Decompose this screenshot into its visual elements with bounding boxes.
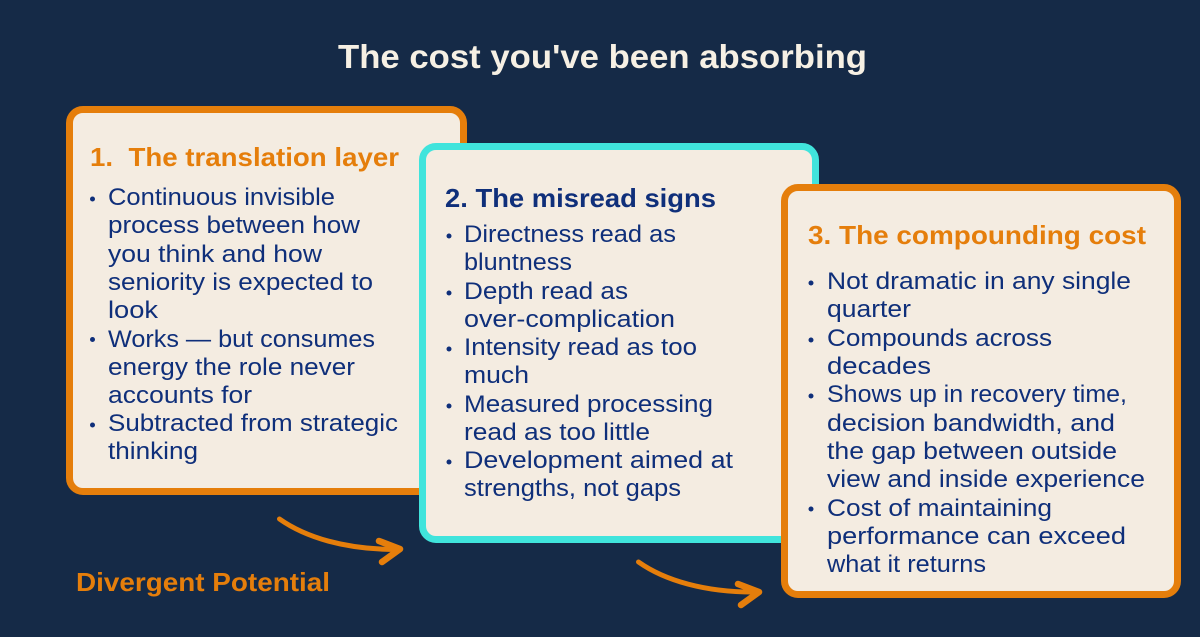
- bullet list: the misread signs: Directness read as: [464, 221, 676, 248]
- bullet list: the translation layer: process between how: [108, 212, 361, 239]
- bullet list: the compounding cost: [808, 268, 1145, 578]
- bullet list: the misread signs: Intensity read as too: [464, 334, 697, 361]
- bullet list: the compounding cost: quarter: [827, 296, 911, 323]
- bullet list: the misread signs: Measured processing: [464, 391, 713, 418]
- bullet list: the translation layer: Continuous invisible: [108, 184, 335, 211]
- arrow: panel 2 to panel 3: [638, 562, 759, 605]
- bullet list: the compounding cost: the gap between outside: [827, 438, 1117, 465]
- heading: the compounding cost: 3. The compounding cost: [808, 220, 1146, 250]
- heading: the misread signs: 2. The misread signs: [445, 183, 716, 213]
- title: The cost you've been absorbing: [338, 38, 867, 75]
- bullet list: the misread signs: [446, 221, 733, 502]
- bullet list: the misread signs: bluntness: [464, 249, 572, 276]
- bullet list: the misread signs: much: [464, 362, 529, 389]
- bullet list: the misread signs: Development aimed at: [464, 447, 733, 474]
- bullet list: the compounding cost: Shows up in recovery time,: [827, 381, 1127, 408]
- bullet list: the compounding cost: view and inside experience: [827, 466, 1145, 493]
- bullet list: the translation layer: thinking: [108, 438, 198, 465]
- arrow: panel 1 to panel 2: [280, 519, 400, 562]
- bullet list: the misread signs: Depth read as: [464, 278, 628, 305]
- bullet list: the compounding cost: what it returns: [826, 551, 986, 578]
- bullet list: the compounding cost: Compounds across: [827, 325, 1052, 352]
- bullet list: the translation layer: [90, 184, 398, 465]
- bullet list: the compounding cost: decision bandwidth, and: [827, 410, 1115, 437]
- bullet list: the misread signs: strengths, not gaps: [464, 475, 681, 502]
- bullet list: the translation layer: Works — but consumes: [108, 326, 375, 353]
- bullet list: the translation layer: you think and how: [108, 241, 323, 268]
- brand label: Divergent Potential: [76, 567, 330, 597]
- bullet list: the translation layer: seniority is expected to: [108, 269, 373, 296]
- bullet list: the translation layer: Subtracted from strategic: [108, 410, 398, 437]
- bullet list: the misread signs: read as too little: [464, 419, 650, 446]
- bullet list: the translation layer: accounts for: [108, 382, 252, 409]
- heading: the translation layer: 1. The translation layer: [90, 142, 399, 172]
- bullet list: the compounding cost: performance can exceed: [827, 523, 1126, 550]
- bullet list: the compounding cost: Cost of maintaining: [827, 495, 1052, 522]
- panel: the translation layer: [70, 110, 464, 492]
- panel: the misread signs: [422, 146, 816, 540]
- bullet list: the compounding cost: Not dramatic in any single: [827, 268, 1131, 295]
- bullet list: the compounding cost: decades: [827, 353, 931, 380]
- panel: the compounding cost: [784, 188, 1178, 594]
- bullet list: the misread signs: over-complication: [464, 306, 675, 333]
- bullet list: the translation layer: energy the role never: [108, 354, 355, 381]
- bullet list: the translation layer: look: [108, 297, 159, 324]
